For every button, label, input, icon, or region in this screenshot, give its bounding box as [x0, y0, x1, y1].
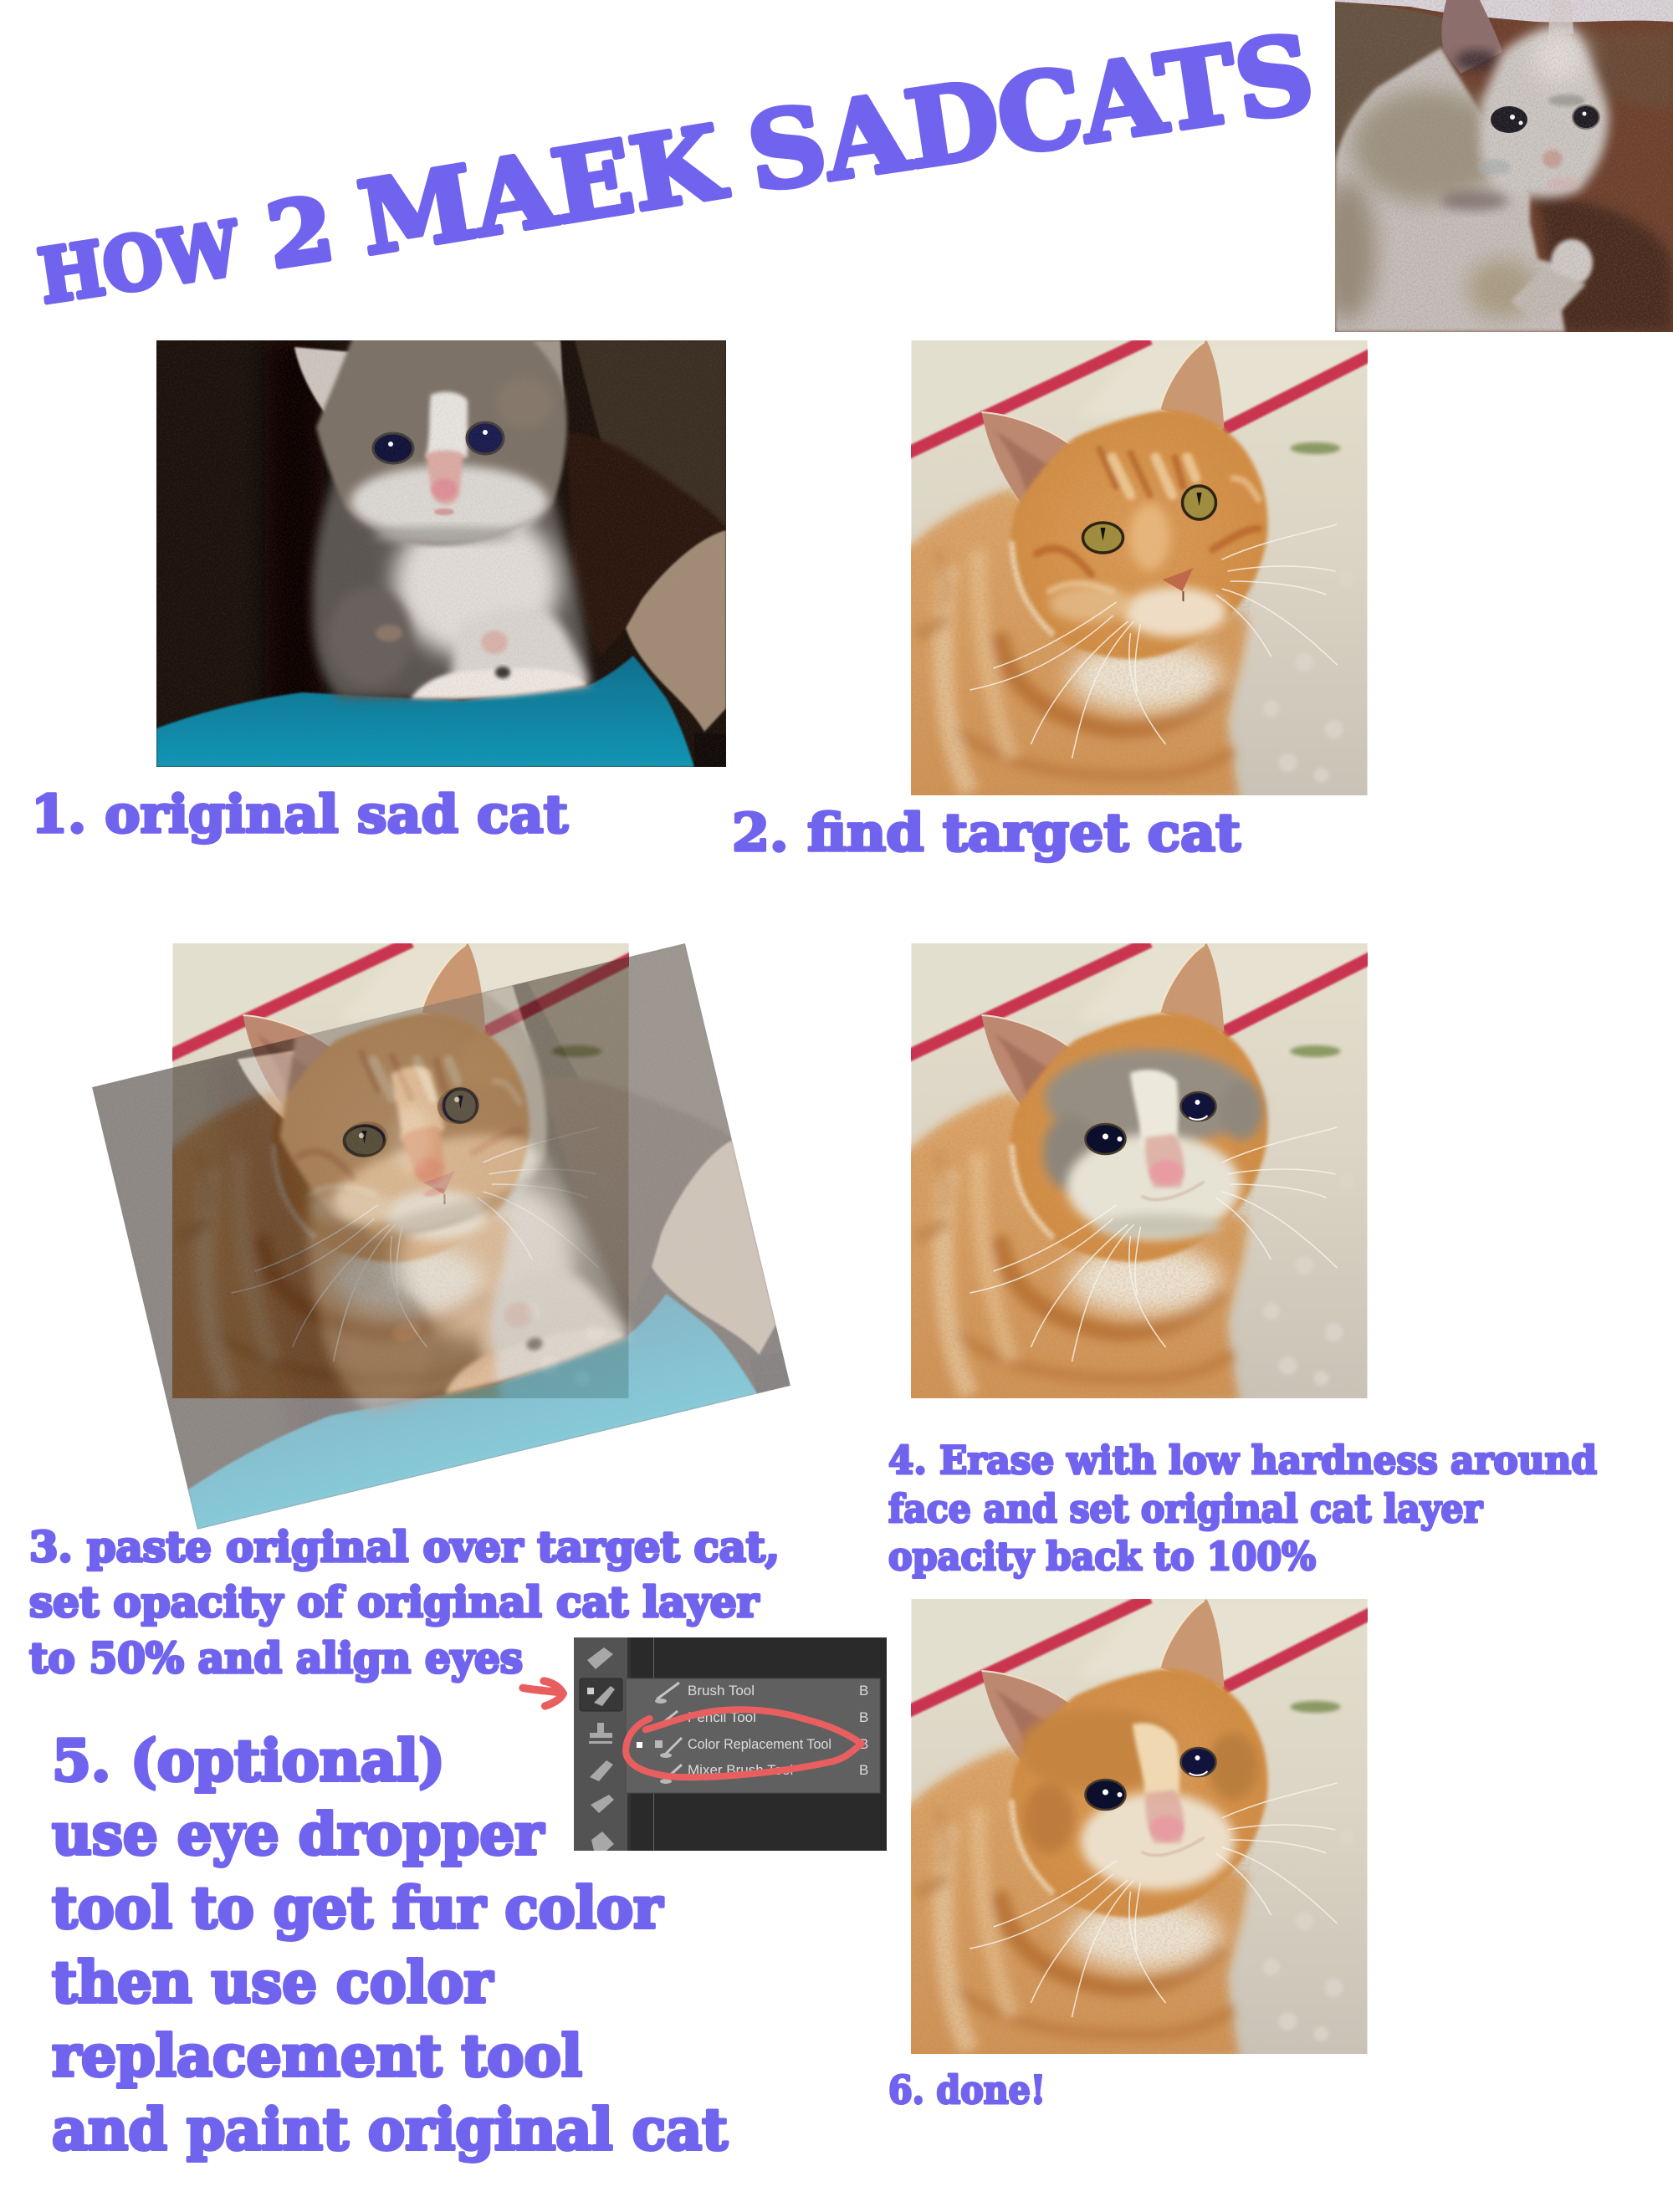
photo: target orange cat: [900, 339, 1372, 807]
menu labels: [688, 1683, 868, 1778]
photo: overlay of kitten on target cat: [91, 939, 790, 1530]
title: [33, 11, 1321, 320]
title: SADCATS: [740, 11, 1321, 216]
step 5 caption: replacement tool: [52, 2023, 582, 2090]
tool icons: [587, 1648, 615, 1851]
step 4 caption: opacity back to 100%: [888, 1534, 1316, 1579]
menu labels: B: [859, 1709, 868, 1725]
step 3 caption: [29, 1522, 780, 1683]
step 3 caption: to 50% and align eyes: [29, 1633, 523, 1683]
arrow: red pointer to toolbar: [523, 1681, 563, 1706]
photo: cat with pasted face, step 4: [900, 942, 1372, 1410]
red hand-drawn circle: [626, 1709, 862, 1777]
step 5 caption: use eye dropper: [52, 1801, 545, 1868]
title: HOW: [33, 204, 246, 320]
step 4 caption: [888, 1438, 1597, 1579]
flyout menu: [626, 1678, 880, 1793]
toolbar screenshot: [574, 1637, 887, 1851]
title: 2: [260, 176, 340, 289]
step 4 caption: 4. Erase with low hardness around: [888, 1438, 1597, 1483]
head: [1480, 28, 1609, 198]
photo: original sad kitten: [156, 336, 726, 767]
step 5 caption: tool to get fur color: [52, 1875, 663, 1942]
step 3 caption: 3. paste original over target cat,: [29, 1522, 780, 1571]
step 3 caption: set opacity of original cat layer: [29, 1577, 760, 1627]
body: [1335, 48, 1573, 332]
step 4 caption: face and set original cat layer: [888, 1486, 1483, 1531]
menu labels: Pencil Tool: [688, 1709, 756, 1725]
menu labels: Color Replacement Tool: [688, 1736, 831, 1752]
menu labels: B: [859, 1683, 868, 1699]
step 5 caption: 5. (optional): [52, 1728, 445, 1795]
step 5 caption: then use color: [52, 1949, 494, 2016]
step 5 caption: and paint original cat: [52, 2097, 729, 2163]
photo: finished sad cat: [900, 1597, 1372, 2066]
step 2 caption: 2. find target cat: [732, 802, 1241, 863]
menu labels: Mixer Brush Tool: [688, 1762, 793, 1778]
paw: [1551, 239, 1593, 286]
icon: selected tool box: [580, 1678, 622, 1711]
eyes and nose: [1491, 106, 1527, 133]
menu labels: Brush Tool: [688, 1683, 755, 1699]
menu labels: B: [859, 1736, 868, 1752]
title: MAEK: [351, 103, 734, 278]
ears: [1441, 0, 1502, 74]
step 5 caption: [52, 1728, 729, 2163]
step 1 caption: 1. original sad cat: [31, 784, 568, 845]
photo: crying white cat top right: [1335, 0, 1673, 332]
menu labels: B: [859, 1762, 868, 1778]
tool column: [574, 1637, 627, 1851]
step 6 caption: 6. done!: [888, 2067, 1046, 2112]
